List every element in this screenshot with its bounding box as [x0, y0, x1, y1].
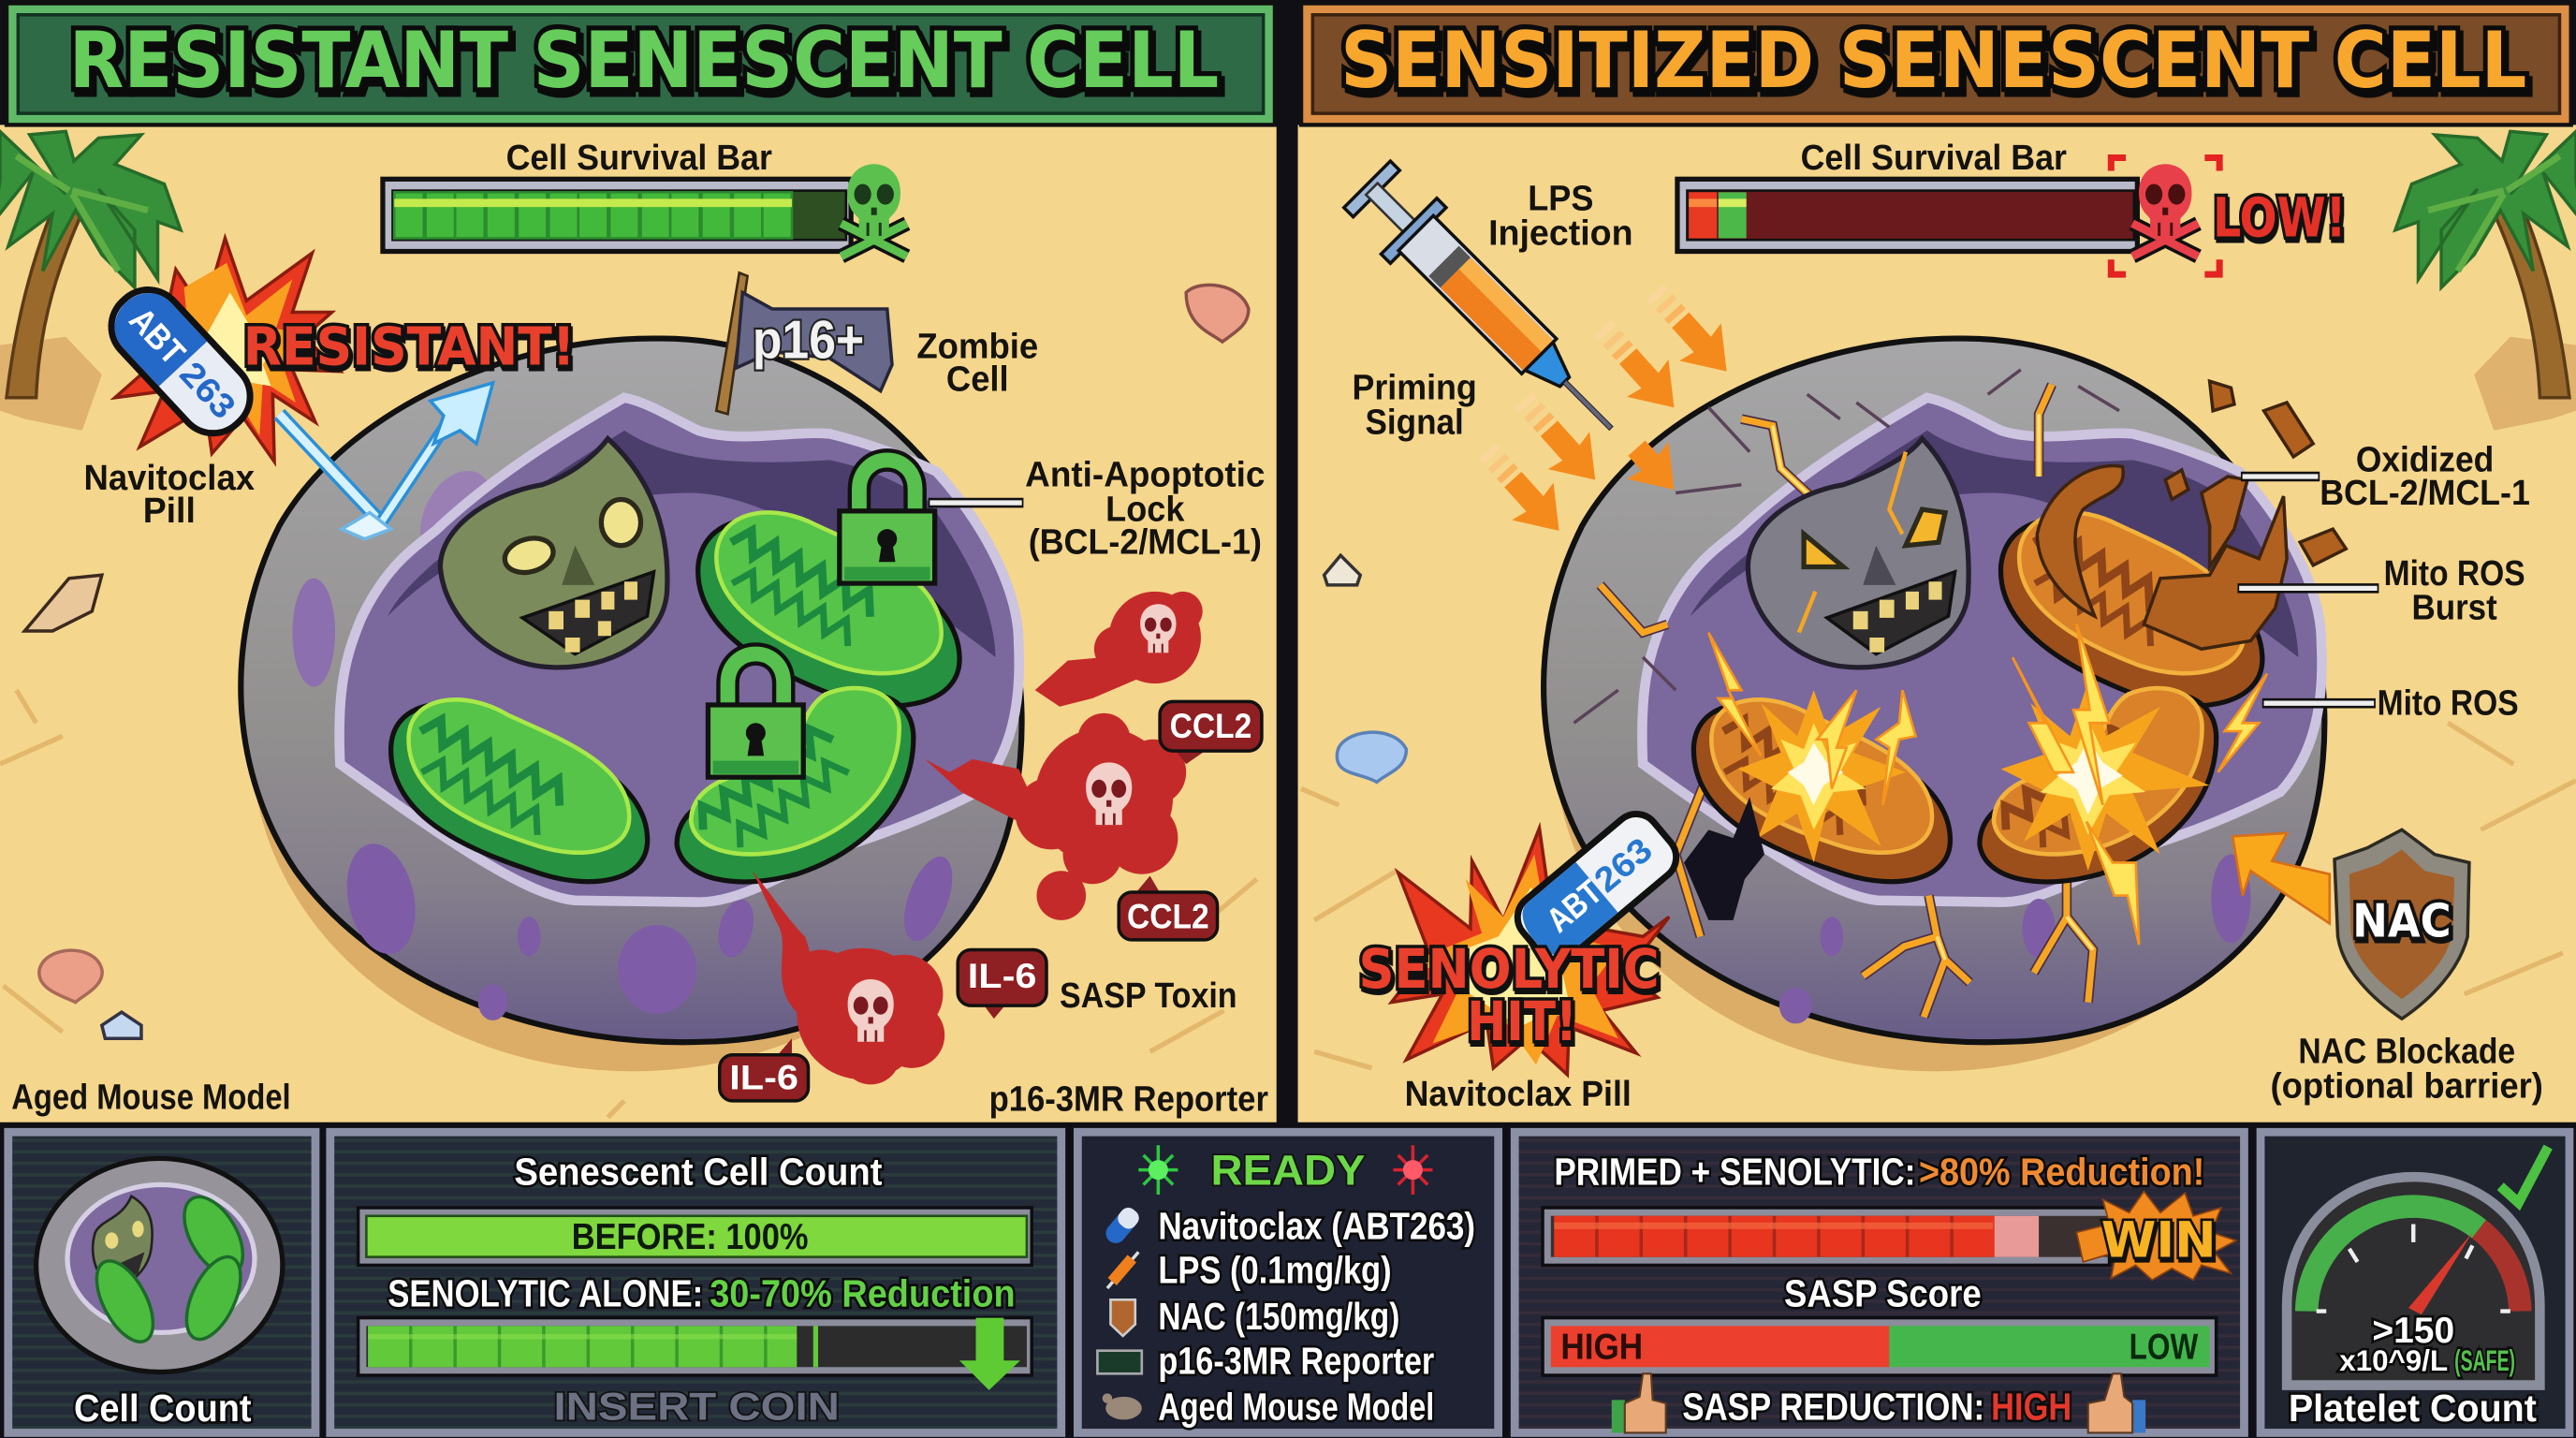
label: zombie cell: Cell [946, 360, 1009, 399]
p16 flag: p16+ [753, 311, 864, 371]
down arrow [959, 1318, 1020, 1390]
hud panel: cell count [8, 1132, 315, 1432]
label: senolytic hit: HIT! [1467, 990, 1577, 1053]
reduced bar [359, 1318, 1032, 1375]
gauge: (SAFE) [2454, 1343, 2515, 1377]
ready: READY [1211, 1146, 1365, 1194]
primed label: PRIMED + SENOLYTIC: [1554, 1150, 1915, 1193]
SASP toxin cloud top [1035, 592, 1203, 707]
priming arrows [1467, 273, 1748, 550]
legend: NAC: NAC (150mg/kg) [1158, 1295, 1399, 1338]
mitochondrion lower left burst [1693, 699, 1950, 882]
cavity rim [340, 398, 1019, 902]
label: zombie cell: Zombie [916, 327, 1038, 366]
label: zombie cell [916, 327, 1038, 399]
hud panel: primed senolytic [1515, 1132, 2244, 1432]
label: oxidized BCL-2 [2320, 440, 2530, 512]
label: senolytic hit: SENOLYTIC [1358, 937, 1660, 1001]
insert coin: INSERT COIN [553, 1384, 840, 1428]
label: cell survival bar: Cell Survival Bar [506, 138, 772, 177]
win burst: WIN [2101, 1212, 2217, 1269]
SASP toxin cloud bottom [753, 871, 944, 1084]
label: mito ROS burst: Mito ROS [2384, 553, 2525, 593]
label: anti-apoptotic lock: Anti-Apoptotic [1025, 455, 1265, 494]
shells [24, 285, 1249, 1038]
primed label [1554, 1150, 2204, 1193]
win burst [2076, 1191, 2236, 1280]
hud panel: senescent cell count [330, 1132, 1061, 1432]
anti-apoptotic lock upper [840, 460, 935, 583]
SASP reduction: HIGH [1991, 1385, 2071, 1428]
palm tree right [2395, 131, 2576, 431]
gauge: >150 [2372, 1311, 2454, 1351]
resistant cell body [241, 339, 1022, 1042]
cell shadow right [1554, 414, 2317, 1071]
senolytic starburst [1392, 829, 1669, 1075]
icon: red skull with brackets [2111, 157, 2219, 274]
legend: LPS: LPS (0.1mg/kg) [1158, 1249, 1392, 1292]
label: oxidized BCL-2: BCL-2/MCL-1 [2320, 473, 2530, 512]
tag: CCL2 lower: CCL2 [1127, 898, 1209, 936]
gauge [2287, 1177, 2539, 1386]
label: SASP toxin: SASP Toxin [1060, 976, 1237, 1015]
mini cell thumbnail [37, 1158, 283, 1372]
label: navitoclax pill: Navitoclax [84, 458, 255, 497]
mitochondrion lower left [391, 699, 648, 882]
sand background right [1298, 125, 2576, 1123]
legend: reporter: p16-3MR Reporter [1158, 1339, 1434, 1382]
hud panel: senescent cell count: Senescent Cell Count [514, 1150, 882, 1193]
label: cell survival bar right: Cell Survival Bar [1801, 138, 2067, 177]
leader lines right [2237, 477, 2378, 703]
icon: green skull [842, 164, 907, 257]
palm tree left [0, 131, 181, 431]
label: anti-apoptotic lock: (BCL-2/MCL-1) [1029, 521, 1262, 561]
legend: mouse [1103, 1385, 1434, 1428]
hud panel: platelet count: Platelet Count [2289, 1387, 2537, 1430]
gauge: x10^9/L [2339, 1343, 2448, 1377]
label: navitoclax pill right: Navitoclax Pill [1405, 1074, 1632, 1113]
icon: navitoclax pill: ABT [122, 301, 193, 373]
sensitized cell body [1544, 339, 2324, 1042]
senolytic alone label [388, 1271, 1016, 1314]
legend: navitoclax: Navitoclax (ABT263) [1158, 1204, 1475, 1247]
anti-apoptotic lock lower [708, 654, 803, 777]
label: NAC blockade: NAC Blockade [2298, 1032, 2515, 1071]
SASP score: SASP Score [1784, 1271, 1982, 1314]
icon: navitoclax pill right [1508, 805, 1686, 970]
label: navitoclax pill: Pill [143, 491, 196, 530]
SASP gradient bar: HIGH [1560, 1327, 1643, 1367]
tag: IL-6 bottom [720, 1038, 809, 1101]
hud panel: platelet count [2261, 1132, 2569, 1432]
oxidized fragments [2037, 381, 2346, 649]
hud panel: cell count: Cell Count [74, 1387, 252, 1430]
label: anti-apoptotic lock: Lock [1105, 489, 1185, 528]
SASP toxin cloud small [1036, 871, 1086, 920]
SASP gradient bar [1543, 1318, 2217, 1375]
label: aged mouse model: Aged Mouse Model [11, 1078, 291, 1117]
label: priming signal: Priming [1352, 367, 1477, 406]
icon: navitoclax pill: 263 [172, 354, 243, 426]
survival bar low [1677, 179, 2137, 252]
thumbs left [1612, 1373, 1666, 1432]
label: low: LOW! [2213, 186, 2346, 250]
survival bar [383, 179, 851, 252]
header: resistant: RESISTANT SENESCENT CELL [69, 16, 1219, 106]
NAC shield [2334, 829, 2469, 1019]
red reduction bar [1543, 1208, 2110, 1265]
p16 flag [716, 272, 892, 414]
header: resistant [7, 4, 1275, 125]
membrane vacuoles [292, 459, 962, 1020]
before bar [359, 1208, 1032, 1265]
label: mito ROS burst [2384, 553, 2525, 627]
label: mito ROS: Mito ROS [2378, 682, 2519, 722]
lock leader line [929, 500, 1023, 506]
shells right [1325, 555, 1406, 782]
sand background left [0, 125, 1277, 1123]
explosion right [2001, 682, 2210, 871]
label: NAC blockade [2271, 1032, 2543, 1105]
tag: CCL2 top [1160, 701, 1262, 764]
label: LPS injection [1488, 179, 1633, 253]
icon: navitoclax pill [97, 275, 264, 448]
thumbs right [2088, 1373, 2145, 1432]
label: anti-apoptotic lock [1025, 455, 1265, 561]
hole in membrane [1684, 797, 1764, 920]
tag: IL-6 bottom: IL-6 [729, 1059, 798, 1097]
label: priming signal [1352, 367, 1477, 441]
panel: resistant senescent cell [0, 125, 1277, 1123]
label: mito ROS burst: Burst [2411, 588, 2497, 627]
icon: syringe [1339, 156, 1639, 456]
check mark [2500, 1147, 2548, 1203]
SASP toxin cloud right [925, 713, 1186, 884]
label: priming signal: Signal [1365, 402, 1464, 441]
tag: IL-6 right [958, 949, 1046, 1019]
tag: IL-6 right: IL-6 [968, 957, 1036, 995]
label: senolytic hit [1358, 937, 1660, 1053]
cracks in cell [1573, 370, 2119, 1017]
mitochondrion lower right burst [1980, 688, 2217, 882]
deflected arrow [279, 383, 493, 539]
senolytic alone label: 30-70% Reduction [710, 1271, 1016, 1314]
senolytic alone label: SENOLYTIC ALONE: [388, 1271, 703, 1314]
orange NAC arrow [2232, 833, 2330, 923]
sand specks [0, 690, 1257, 1117]
label: navitoclax pill [84, 458, 255, 530]
zombie face [440, 439, 667, 668]
mitochondrion upper [698, 512, 959, 706]
primed label: >80% Reduction! [1919, 1150, 2204, 1193]
explosion left [1738, 690, 1906, 862]
label: LPS injection: LPS [1528, 179, 1593, 218]
label: resistant: RESISTANT! [243, 317, 575, 378]
label: LPS injection: Injection [1488, 213, 1633, 253]
tag: CCL2 top: CCL2 [1170, 707, 1251, 745]
mitochondrion lower right [677, 688, 914, 882]
label: p16-3MR reporter: p16-3MR Reporter [989, 1078, 1268, 1118]
impact burst [115, 238, 340, 462]
label: oxidized BCL-2: Oxidized [2356, 440, 2494, 479]
before bar: BEFORE: 100% [572, 1217, 809, 1257]
cell shadow [252, 414, 1014, 1071]
SASP gradient bar: LOW [2130, 1327, 2199, 1367]
panel: sensitized senescent cell [1298, 125, 2576, 1123]
mitochondrion oxidized upper [2000, 512, 2262, 706]
icon: navitoclax pill right: 263 [1587, 830, 1660, 900]
cavity back wall [388, 431, 996, 657]
green star light [1138, 1145, 1178, 1195]
icon: navitoclax pill right: ABT [1539, 873, 1609, 940]
legend: mouse: Aged Mouse Model [1158, 1385, 1434, 1428]
zombie face grey [1748, 439, 1969, 668]
SASP reduction: SASP REDUCTION: [1682, 1385, 1984, 1428]
red star light [1393, 1145, 1432, 1195]
sand specks right [1301, 723, 2576, 1068]
lightning bolts [1708, 624, 2267, 945]
hud panel: ready legend [1077, 1132, 1499, 1432]
tag: CCL2 lower [1119, 875, 1218, 940]
label: NAC blockade: (optional barrier) [2271, 1065, 2543, 1105]
NAC shield: NAC [2352, 893, 2452, 947]
